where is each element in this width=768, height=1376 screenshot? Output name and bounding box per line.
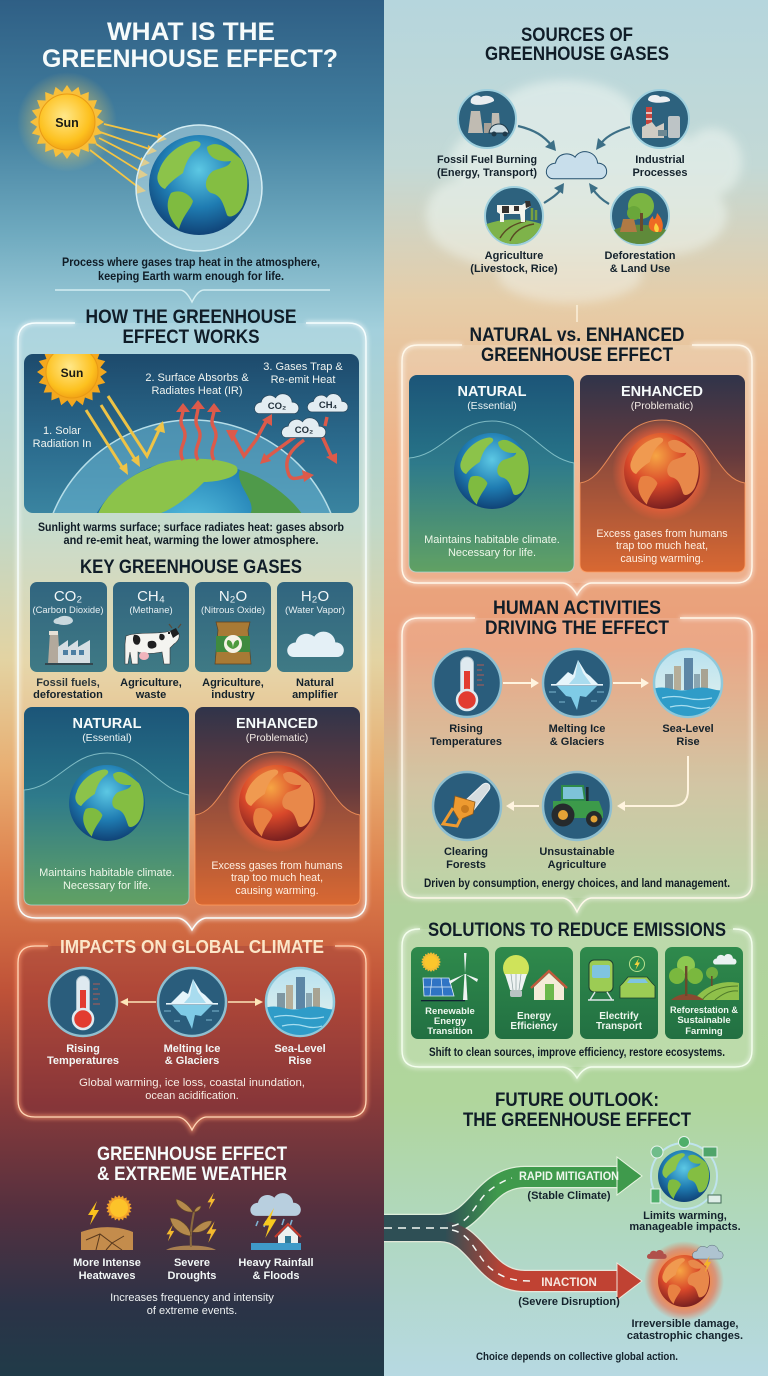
card: CO2 (30, 582, 107, 672)
impact labels: Melting Ice (164, 1043, 220, 1055)
heading: extreme weather: GREENHOUSE EFFECT (97, 1144, 287, 1165)
heading: key greenhouse gases: KEY GREENHOUSE GASES (80, 557, 302, 578)
card: N2O (195, 582, 271, 672)
card: renewable energy: Renewable (425, 1006, 475, 1017)
panel: solutions (402, 920, 752, 1078)
road labels: (Severe Disruption) (518, 1296, 620, 1308)
card: H2O (277, 582, 353, 672)
gas captions: waste (135, 689, 166, 701)
caption: burning earth: catastrophic changes. (627, 1330, 743, 1342)
icon: earth with atmosphere halo (136, 125, 262, 251)
caption: burning earth (627, 1318, 743, 1342)
card: enhanced effect: trap too much heat, (231, 872, 323, 884)
label: surface absorbs: Radiates Heat (IR) (151, 385, 243, 397)
heading: sources: GREENHOUSE GASES (485, 44, 669, 65)
gas clouds: CO₂ (295, 425, 313, 436)
icon: sea level (264, 968, 344, 1042)
intro text (62, 257, 320, 283)
icon: burning earth (644, 1241, 724, 1321)
activity labels: Agriculture (548, 859, 606, 871)
icon: heatwave (81, 1195, 133, 1250)
impact labels: Temperatures (47, 1055, 119, 1067)
caption: mechanism: Sunlight warms surface; surface radiates heat: gases absorb (38, 522, 344, 534)
activity labels: Sea-Level (662, 723, 714, 735)
arrows: radiated heat (176, 400, 337, 482)
impacts summary: Global warming, ice loss, coastal inundation, (79, 1077, 305, 1089)
icon: drought plant (166, 1193, 216, 1250)
card: CH4: (Methane) (129, 605, 173, 616)
activity labels: Rising (449, 723, 483, 735)
background: right column (384, 0, 768, 1376)
label: surface absorbs (145, 372, 249, 397)
card: electrify transport: Transport (596, 1021, 643, 1032)
activity labels (430, 723, 714, 871)
card: CO2: (Carbon Dioxide) (32, 605, 104, 616)
card: enhanced: Excess gases from humans (596, 528, 728, 540)
heading: SOLUTIONS TO REDUCE EMISSIONS (428, 920, 726, 941)
card: enhanced: causing warming. (620, 553, 704, 565)
weather labels: Heavy Rainfall (238, 1257, 314, 1269)
heading: HUMAN ACTIVITIES (493, 598, 661, 619)
gas captions: industry (211, 689, 256, 701)
card: natural effect (24, 707, 189, 905)
icon: fertilizer bag (215, 622, 251, 664)
heading: future outlook: THE GREENHOUSE EFFECT (463, 1110, 691, 1131)
activities summary: Driven by consumption, energy choices, and land management. (424, 878, 730, 890)
road labels (518, 1171, 620, 1308)
heading: DRIVING THE EFFECT (485, 618, 669, 639)
panel: impacts on global climate (18, 937, 366, 1130)
gas clouds: CH₄ (319, 400, 338, 411)
panel: natural vs enhanced (402, 325, 752, 595)
title (42, 18, 338, 73)
diagram: greenhouse mechanism (24, 354, 359, 513)
heading: extreme weather (97, 1144, 287, 1185)
card: natural: (Essential) (467, 400, 517, 412)
card: natural effect: NATURAL (72, 716, 142, 732)
weather summary (110, 1292, 274, 1317)
icon: sun with rays reaching earth (17, 72, 167, 194)
card: CH4: CH₄ (137, 588, 165, 605)
card: natural effect: (Essential) (82, 732, 132, 744)
icon: flood (250, 1193, 301, 1250)
icon: agriculture (485, 187, 543, 245)
gas captions: Natural (296, 677, 334, 689)
panel: human activities (402, 598, 752, 912)
icon: tractor (543, 772, 611, 840)
gas clouds: CO₂ (268, 401, 286, 412)
activity labels: Forests (446, 859, 486, 871)
card: enhanced effect (195, 707, 360, 905)
card: energy efficiency: Energy (517, 1011, 551, 1022)
activity labels: Rise (676, 736, 700, 748)
activity labels: Melting Ice (549, 723, 605, 735)
icon: industry (631, 90, 689, 148)
card: natural effect: Maintains habitable climate. (39, 867, 175, 879)
heading: extreme weather: & EXTREME WEATHER (97, 1164, 287, 1185)
diagram: greenhouse mechanism: Sun (61, 366, 83, 380)
card: enhanced: trap too much heat, (616, 540, 708, 552)
card: enhanced (580, 375, 745, 572)
card: enhanced effect: Excess gases from humans (211, 860, 343, 872)
source labels (437, 154, 688, 275)
arrows between impacts (120, 998, 263, 1006)
icon: iceberg (158, 968, 226, 1036)
icon: tree and field (669, 954, 739, 1000)
card: enhanced effect: causing warming. (235, 885, 319, 897)
background: left column (0, 0, 384, 1376)
card: enhanced: ENHANCED (621, 384, 703, 400)
card: renewable energy: Transition (427, 1026, 473, 1037)
label: solar radiation: Radiation In (33, 438, 91, 450)
card: renewable energy (411, 947, 489, 1039)
weather labels: More Intense (73, 1257, 141, 1269)
solutions summary: Shift to clean sources, improve efficiency, restore ecosystems. (429, 1047, 725, 1059)
card: N2O: (Nitrous Oxide) (201, 605, 265, 616)
card: H2O: (Water Vapor) (285, 605, 345, 616)
weather labels: Severe (174, 1257, 210, 1269)
icon: healthy earth (651, 1136, 721, 1209)
heading: impacts: IMPACTS ON GLOBAL CLIMATE (60, 937, 324, 957)
card: CO2: CO₂ (54, 588, 82, 605)
card: reforestation (665, 947, 743, 1039)
gas clouds (254, 394, 348, 438)
heading: future outlook: FUTURE OUTLOOK: (495, 1090, 659, 1111)
card: enhanced: (Problematic) (631, 400, 693, 412)
activity labels: Clearing (444, 846, 488, 858)
icon: chainsaw (433, 772, 501, 840)
source labels: Processes (632, 167, 688, 179)
heading (485, 598, 669, 639)
weather labels (73, 1257, 314, 1282)
arrows: incoming solar radiation (86, 396, 165, 475)
source labels: Fossil Fuel Burning (437, 154, 537, 166)
activity labels: Temperatures (430, 736, 502, 748)
icon: fossil fuel (458, 90, 516, 148)
heading: future outlook (463, 1090, 691, 1131)
icon: sun with rays reaching earth: Sun (55, 116, 79, 130)
road labels: RAPID MITIGATION (519, 1171, 619, 1183)
title: GREENHOUSE EFFECT? (42, 45, 338, 73)
label: gases trap (263, 361, 343, 386)
card: energy efficiency: Efficiency (510, 1021, 558, 1032)
card: enhanced effect: ENHANCED (236, 716, 318, 732)
weather labels: Droughts (168, 1270, 216, 1282)
card: natural effect: Necessary for life. (63, 880, 151, 892)
card: electrify transport (580, 947, 658, 1039)
heading: how it works: HOW THE GREENHOUSE (86, 307, 296, 328)
gas captions: amplifier (292, 689, 339, 701)
heading: how it works: EFFECT WORKS (122, 327, 260, 348)
intro text: Process where gases trap heat in the atmosphere, (62, 257, 320, 269)
icon: train and car (588, 956, 655, 1000)
closing line: Choice depends on collective global action. (476, 1351, 678, 1363)
gas captions: Agriculture, (120, 677, 182, 689)
source labels: Deforestation (605, 250, 676, 262)
gas captions: Agriculture, (202, 677, 264, 689)
caption: healthy earth (629, 1210, 741, 1233)
card: H2O: H₂O (301, 588, 329, 605)
caption: burning earth: Irreversible damage, (631, 1318, 739, 1330)
heading: how it works (86, 307, 296, 348)
caption: healthy earth: Limits warming, (643, 1210, 727, 1222)
impacts summary: ocean acidification. (145, 1090, 239, 1102)
card: natural: Maintains habitable climate. (424, 534, 560, 546)
icon: sea level (652, 649, 732, 723)
weather summary: Increases frequency and intensity (110, 1292, 274, 1304)
source labels: Industrial (635, 154, 685, 166)
intro text: keeping Earth warm enough for life. (98, 271, 284, 283)
gas captions: deforestation (33, 689, 103, 701)
impact labels: Rise (288, 1055, 312, 1067)
icon: bulb and house (503, 955, 567, 1000)
card: natural (409, 375, 574, 572)
heading (470, 325, 684, 366)
card: enhanced effect: (Problematic) (246, 732, 308, 744)
caption: mechanism: and re-emit heat, warming the lower atmosphere. (64, 535, 318, 547)
card: reforestation: Sustainable (677, 1015, 731, 1026)
caption: mechanism (38, 522, 344, 547)
card: natural: Necessary for life. (448, 547, 536, 559)
card: N2O: N₂O (219, 588, 247, 605)
source labels: Agriculture (485, 250, 543, 262)
label: gases trap: Re-emit Heat (271, 374, 335, 386)
impact labels: & Glaciers (165, 1055, 219, 1067)
icon: cloud (287, 632, 344, 657)
source labels: (Livestock, Rice) (470, 263, 558, 275)
card: electrify transport: Electrify (599, 1011, 639, 1022)
card: reforestation: Farming (685, 1026, 723, 1037)
source labels: & Land Use (610, 263, 670, 275)
label: solar radiation: 1. Solar (43, 425, 81, 437)
gas captions (33, 677, 339, 701)
weather summary: of extreme events. (147, 1305, 237, 1317)
flow arrows (503, 678, 688, 811)
activity labels: & Glaciers (550, 736, 604, 748)
icon: solar and wind (421, 952, 478, 1001)
card: energy efficiency (495, 947, 573, 1039)
icon: cow (125, 624, 181, 664)
connector (576, 305, 578, 322)
impact labels: Rising (66, 1043, 100, 1055)
impacts summary (79, 1077, 305, 1102)
icon: thermometer (433, 649, 501, 717)
impact labels (47, 1043, 326, 1067)
card: CH4 (113, 582, 189, 672)
icon: deforestation (611, 187, 669, 245)
heading: NATURAL vs. ENHANCED (470, 325, 684, 346)
road labels: INACTION (541, 1277, 597, 1289)
card: natural: NATURAL (458, 384, 527, 400)
card: renewable energy: Energy (434, 1016, 467, 1027)
gas captions: Fossil fuels, (36, 677, 100, 689)
heading: sources (485, 25, 669, 65)
heading: GREENHOUSE EFFECT (481, 345, 673, 366)
icon: factory (45, 616, 93, 665)
caption: healthy earth: manageable impacts. (629, 1221, 741, 1233)
road: branching paths (384, 1157, 642, 1300)
label: gases trap: 3. Gases Trap & (263, 361, 343, 373)
heading: sources: SOURCES OF (521, 25, 633, 46)
icon: central cloud (546, 152, 607, 179)
impact labels: Sea-Level (274, 1043, 326, 1055)
activity labels: Unsustainable (539, 846, 615, 858)
backdrop cloud (426, 80, 742, 303)
title: WHAT IS THE (107, 18, 275, 46)
source arrows (518, 126, 630, 204)
road labels: (Stable Climate) (527, 1190, 611, 1202)
label: solar radiation (33, 425, 91, 450)
icon: thermometer (49, 968, 117, 1036)
source labels: (Energy, Transport) (437, 167, 537, 179)
card: reforestation: Reforestation & (670, 1005, 738, 1016)
divider chevron (55, 290, 330, 302)
icon: iceberg (543, 649, 611, 717)
weather labels: & Floods (252, 1270, 300, 1282)
weather labels: Heatwaves (79, 1270, 135, 1282)
label: surface absorbs: 2. Surface Absorbs & (145, 372, 249, 384)
panel: how the greenhouse effect works (18, 307, 366, 930)
